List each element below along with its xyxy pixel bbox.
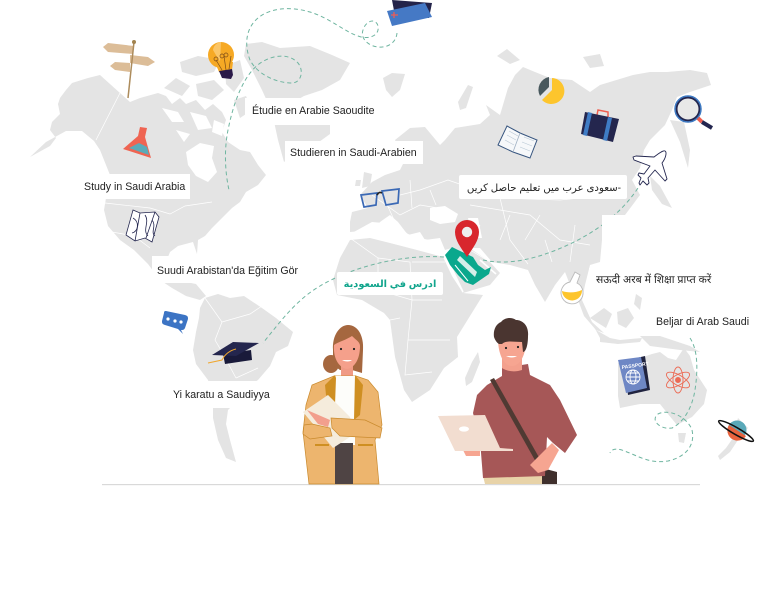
person: man with laptop bbox=[438, 318, 577, 484]
dashed route: top loop bbox=[225, 9, 397, 190]
label box: Turkish bbox=[152, 256, 305, 283]
label box: Indonesian: Beljar di Arab Saudi bbox=[656, 316, 749, 328]
dashed route: Australia bbox=[610, 338, 697, 462]
label box: Urdu bbox=[459, 175, 627, 199]
map borders bbox=[96, 93, 610, 378]
label box: Indonesian bbox=[650, 310, 771, 335]
label box: Arabic: ادرس في السعودية bbox=[344, 279, 436, 290]
ground line bbox=[102, 484, 700, 485]
icon: pie chart bbox=[538, 77, 564, 104]
label box: Arabic bbox=[337, 272, 443, 295]
icon: light bulb bbox=[208, 42, 234, 79]
label box: French: Étudie en Arabie Saoudite bbox=[252, 104, 375, 117]
world map bbox=[30, 42, 748, 462]
label box: Hindi: सऊदी अरब में शिक्षा प्राप्त करें bbox=[596, 273, 712, 286]
label box: Hausa: Yi karatu a Saudiyya bbox=[173, 389, 270, 401]
icon: planet bbox=[717, 418, 755, 444]
label box: German: Studieren in Saudi-Arabien bbox=[290, 147, 417, 159]
person: woman with documents bbox=[303, 325, 382, 484]
label box: Hausa bbox=[165, 381, 280, 408]
blank label box bbox=[602, 215, 771, 240]
icon: glasses bbox=[361, 189, 399, 207]
label box: English bbox=[80, 174, 190, 199]
icon: airplane bbox=[633, 151, 667, 185]
icon: passport bbox=[618, 356, 650, 395]
icon: atom bbox=[664, 367, 692, 393]
icon: magnifying glass bbox=[675, 96, 712, 128]
icon: round flask bbox=[561, 272, 583, 304]
icon: plane tickets bbox=[387, 0, 432, 26]
label box: Hindi bbox=[589, 268, 719, 293]
icon: passport: PASSPORT bbox=[621, 361, 649, 371]
label box: French bbox=[245, 98, 381, 125]
icon: folded map bbox=[126, 210, 159, 242]
label box: Urdu: سعودی عرب میں تعلیم حاصل کریں- bbox=[467, 183, 621, 194]
label box: English: Study in Saudi Arabia bbox=[84, 181, 185, 193]
icon: location pin on Saudi flag map bbox=[445, 220, 491, 285]
icon: chat bubble bbox=[162, 311, 188, 334]
icon: chemistry flask bbox=[123, 127, 151, 158]
icon: open book bbox=[498, 126, 537, 158]
label box: German bbox=[285, 141, 423, 164]
dashed route: Saudi Arabia to plane bbox=[483, 188, 638, 262]
icon: suitcase bbox=[581, 110, 619, 142]
dashed route: Saudi Arabia to South America bbox=[263, 257, 444, 343]
icon: signpost bbox=[103, 40, 155, 98]
label box: Turkish: Suudi Arabistan'da Eğitim Gör bbox=[157, 265, 298, 277]
icon: graduation cap bbox=[208, 342, 259, 364]
